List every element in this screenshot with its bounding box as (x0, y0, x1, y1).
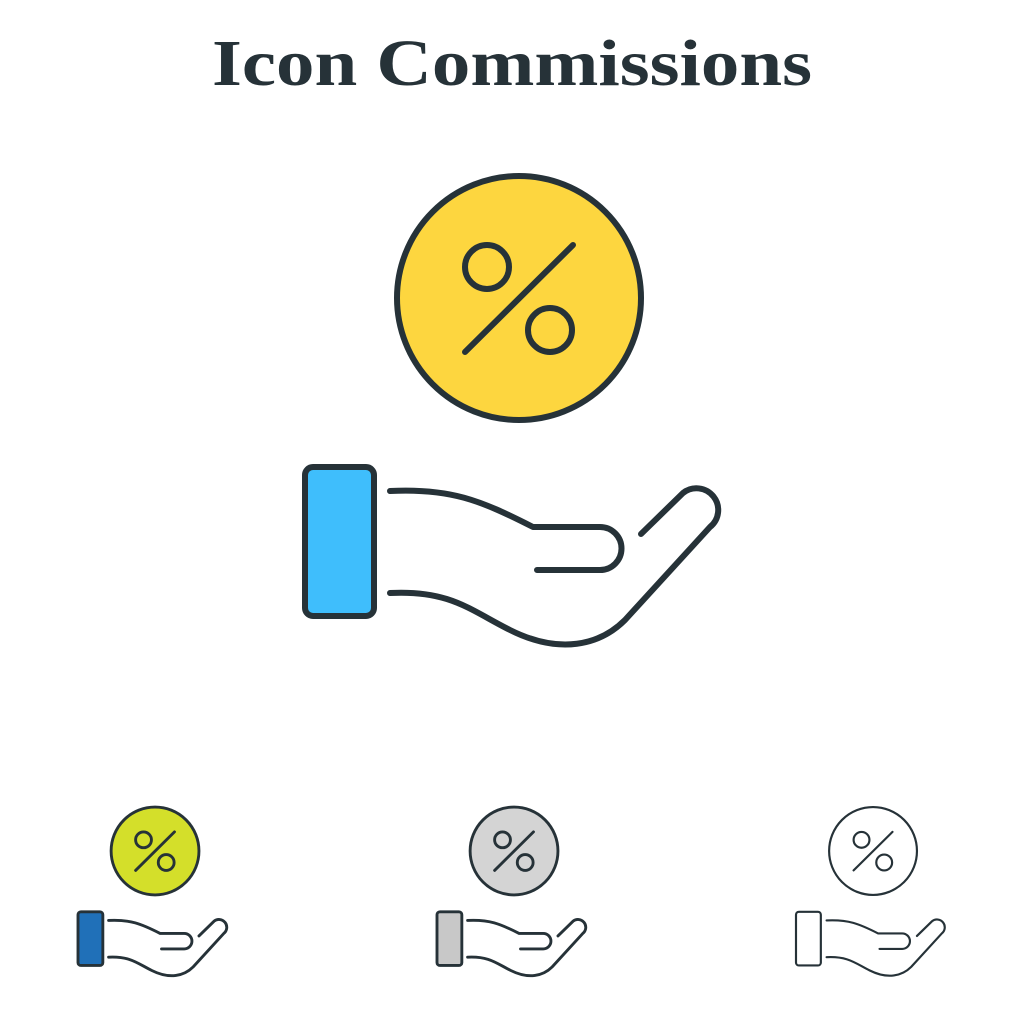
coin (397, 176, 641, 420)
hand outline (390, 488, 718, 644)
cuff (305, 467, 374, 616)
title: Icon Commissions (212, 27, 812, 100)
variant: grey (437, 807, 586, 976)
variant: outline (796, 807, 945, 976)
main icon: hand with percent coin (305, 176, 718, 644)
percent sign (465, 245, 573, 352)
variant: lime and blue (78, 807, 227, 976)
